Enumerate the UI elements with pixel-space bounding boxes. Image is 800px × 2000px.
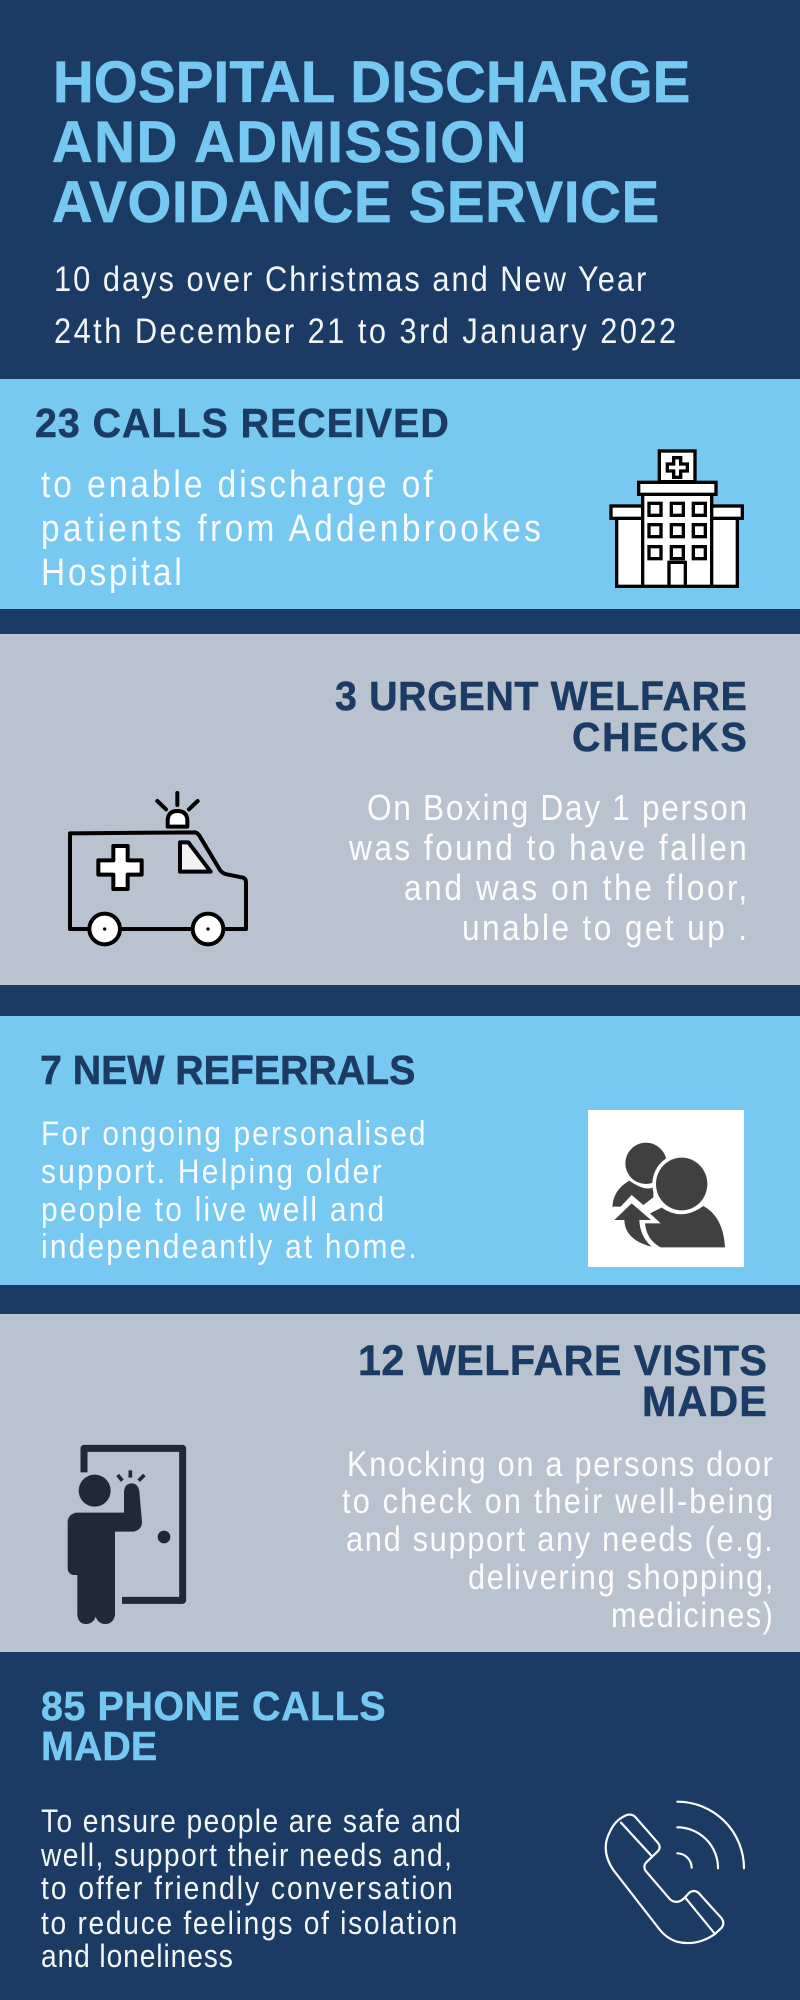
text: referrals description: independeantly at home. [41,1227,417,1265]
panel: 3 urgent welfare checks [0,634,800,985]
icon: hospital [611,451,742,586]
text: welfare visits description: medicines) [611,1595,773,1634]
text: welfare visits description: and support any needs (e.g. [346,1519,773,1558]
panel: 23 calls received [0,379,800,609]
subtitle: dates [54,259,676,350]
icon: telephone [606,1802,744,1943]
panel: 12 welfare visits made [0,1314,800,1652]
heading: 23 calls received: 23 CALLS RECEIVED [35,400,449,446]
heading: 12 welfare visits made: 12 WELFARE VISITS [358,1336,767,1384]
text: boxing day description: was found to have fallen [348,828,747,868]
heading: 3 urgent welfare checks: CHECKS [572,714,747,760]
text: phone calls description: to offer friendly conversation [41,1871,453,1906]
text: phone calls description: To ensure people are safe and [41,1804,461,1839]
text: boxing day description [348,788,747,948]
heading: 85 phone calls made: 85 PHONE CALLS [41,1683,386,1729]
text: welfare visits description: delivering shopping, [468,1557,773,1596]
title: HOSPITAL DISCHARGE [53,50,690,115]
panel: 85 phone calls made [40,1683,744,1974]
icon: ambulance [70,793,246,944]
text: referrals description: For ongoing personalised [41,1114,426,1152]
heading: 12 welfare visits made [358,1336,767,1425]
text: referrals description: people to live well and [41,1190,384,1228]
text: boxing day description: On Boxing Day 1 person [367,788,747,828]
text: phone calls description: and loneliness [41,1939,233,1974]
text: phone calls description: to reduce feelings of isolation [41,1906,457,1941]
text: referrals description [41,1114,426,1265]
icon: person knocking on door [68,1448,183,1624]
text: phone calls description: well, support their needs and, [40,1838,452,1873]
text: discharge description: Hospital [41,551,182,593]
text: welfare visits description: to check on their well-being [342,1481,773,1520]
heading: 85 phone calls made: MADE [41,1723,157,1769]
text: welfare visits description [342,1444,773,1634]
text: phone calls description [40,1804,461,1974]
text: welfare visits description: Knocking on a persons door [347,1444,773,1483]
text: boxing day description: unable to get up . [462,908,747,948]
heading: 85 phone calls made [41,1683,386,1769]
heading: 7 new referrals: 7 NEW REFERRALS [40,1047,415,1093]
text: discharge description: patients from Addenbrookes [41,507,541,549]
heading: 12 welfare visits made: MADE [642,1377,767,1425]
subtitle: dates: 24th December 21 to 3rd January 2022 [54,311,676,350]
title [52,50,690,235]
heading: 3 urgent welfare checks: 3 URGENT WELFARE [335,673,747,719]
text: boxing day description: and was on the floor, [404,868,747,908]
icon: people referral [588,1110,744,1267]
text: discharge description [41,463,541,593]
subtitle: dates: 10 days over Christmas and New Year [54,259,646,298]
title: AVOIDANCE SERVICE [52,170,659,235]
text: discharge description: to enable discharge of [41,463,433,505]
heading: 3 urgent welfare checks [335,673,747,760]
panel: 7 new referrals [0,1016,800,1285]
title: AND ADMISSION [52,110,526,175]
text: referrals description: support. Helping older [41,1152,382,1190]
